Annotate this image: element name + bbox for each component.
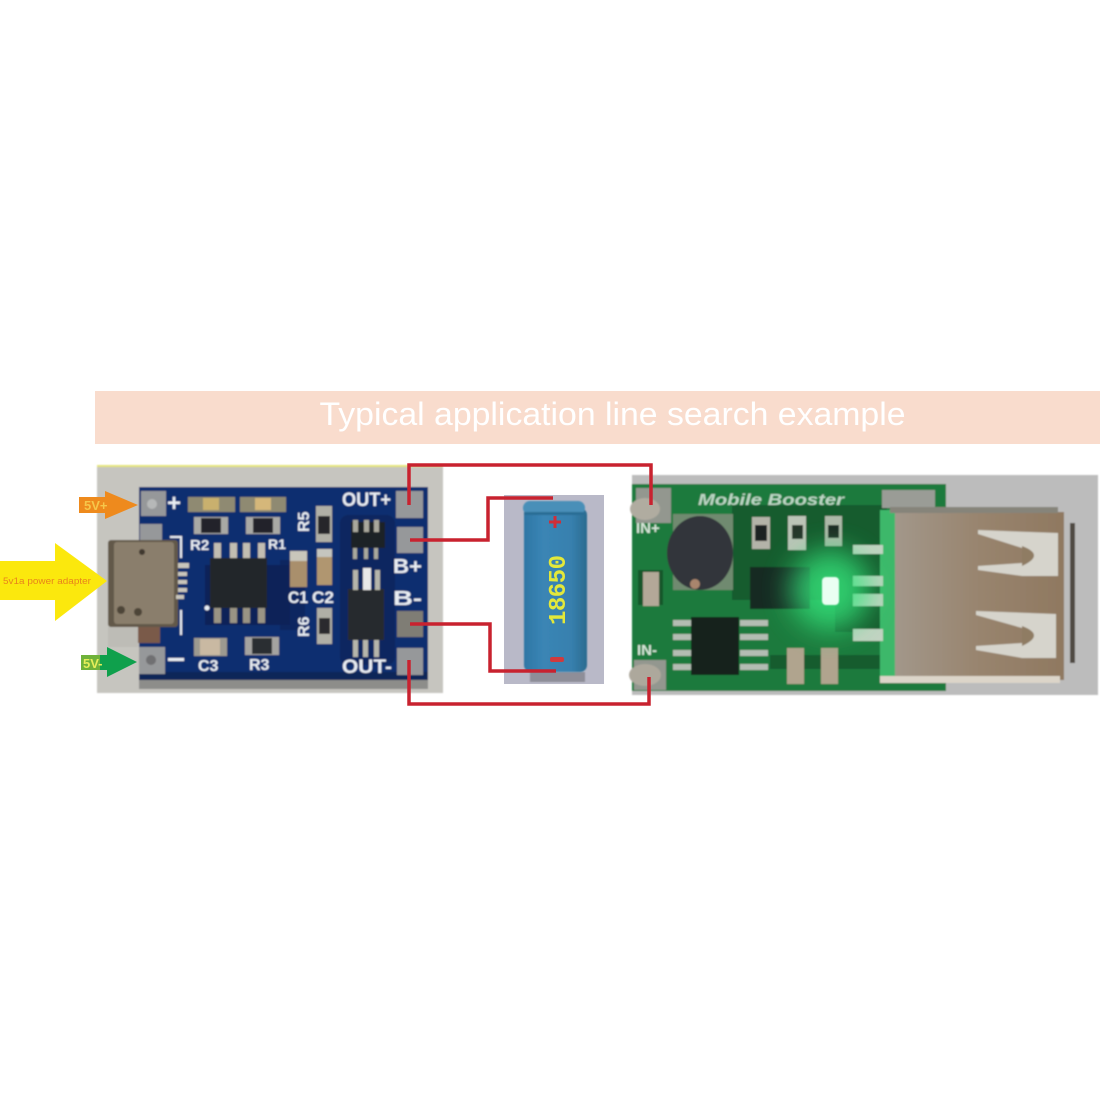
- board silkscreen labels: R5: [296, 511, 313, 532]
- arrow: 5V+ orange: 5V+: [84, 498, 108, 513]
- board silkscreen labels: OUT-: [342, 657, 392, 678]
- blue circuit board: [139, 487, 428, 680]
- panel: charger board photo: [97, 465, 443, 693]
- board silkscreen labels: R3: [249, 657, 270, 674]
- protection chips: [348, 520, 385, 657]
- board silkscreen labels: C3: [198, 658, 219, 675]
- battery body: [523, 501, 587, 672]
- title: Typical application line search example: [320, 396, 906, 432]
- pads: [636, 488, 671, 523]
- micro USB connector: [108, 536, 189, 647]
- USB pins: [853, 545, 883, 641]
- battery plus: [549, 516, 561, 528]
- board silkscreen labels: R6: [296, 616, 313, 637]
- panel: mobile booster board photo: IN+: [636, 520, 660, 537]
- board silkscreen labels: OUT+: [342, 490, 391, 511]
- board silkscreen labels: [167, 490, 422, 678]
- arrow: 5v1a power adapter yellow: [0, 543, 107, 621]
- board silkscreen labels: +: [167, 490, 181, 517]
- SOP chip: [673, 617, 768, 675]
- arrow: 5V- green: [81, 647, 137, 677]
- USB connector: [880, 490, 1075, 683]
- inductor: [673, 514, 733, 590]
- board silkscreen labels: C1: [288, 588, 308, 607]
- solder pads: [139, 491, 423, 675]
- charger IC chip: [204, 543, 267, 623]
- green board: [632, 484, 946, 691]
- small components: [752, 516, 842, 684]
- arrow: 5V+ orange: [79, 491, 138, 519]
- icon: green LED glow: [790, 550, 870, 630]
- arrow: 5V- green: 5V-: [83, 656, 103, 671]
- battery minus: [550, 657, 564, 662]
- arrow: 5v1a power adapter yellow: 5v1a power adapter: [3, 576, 91, 586]
- board silkscreen labels: R1: [268, 536, 286, 552]
- panel: mobile booster board photo: [629, 475, 1098, 695]
- banner: [95, 391, 1100, 444]
- battery label: 18650: [546, 555, 573, 625]
- board silkscreen: Mobile Booster: [698, 492, 845, 509]
- board silkscreen labels: R2: [190, 537, 209, 554]
- board silkscreen labels: B+: [393, 556, 422, 578]
- board silkscreen labels: B-: [393, 588, 422, 610]
- SOT chip: [750, 567, 810, 609]
- wiring: red connections: [409, 465, 651, 704]
- board silkscreen labels: C2: [312, 588, 334, 607]
- panel: 18650 battery photo: [504, 495, 604, 684]
- panel: mobile booster board photo: IN-: [637, 642, 657, 659]
- LEDs and resistors: [188, 497, 332, 656]
